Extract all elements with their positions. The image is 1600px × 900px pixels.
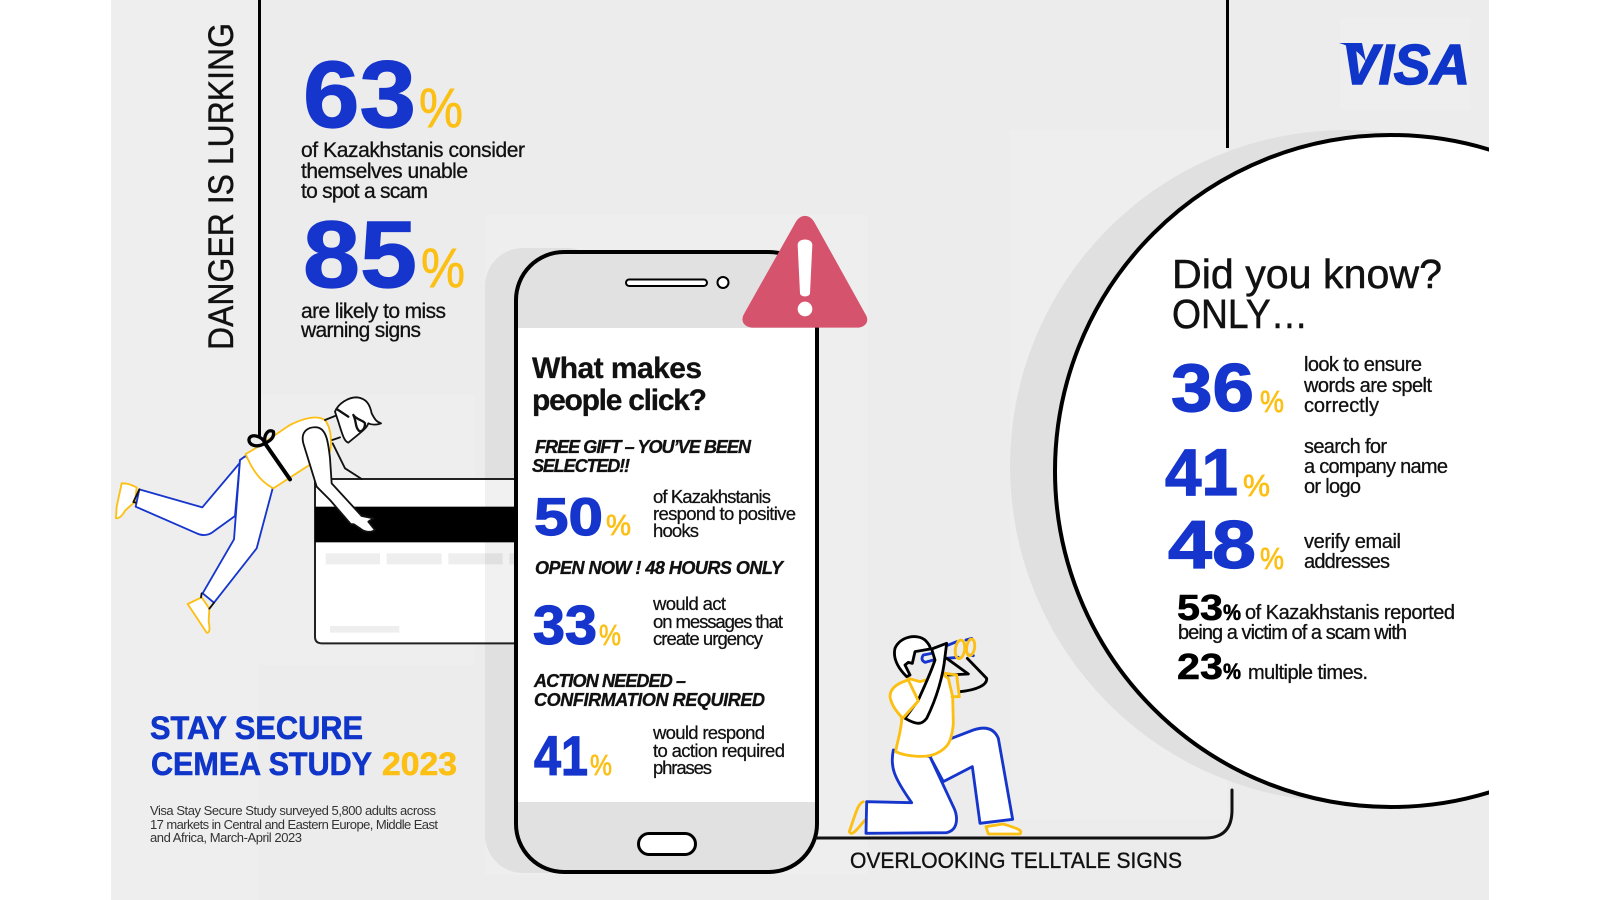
camera bbox=[718, 277, 728, 288]
hook: free gift: SELECTED!! bbox=[532, 456, 630, 476]
victim stat: % bbox=[1223, 659, 1241, 684]
stat: 41 percent: search for bbox=[1304, 436, 1387, 458]
hook: urgency: % bbox=[599, 620, 621, 652]
rear arm bbox=[333, 443, 362, 479]
rear arm bbox=[947, 658, 987, 692]
victim stat: multiple times. bbox=[1248, 662, 1368, 684]
stat: 48 percent: % bbox=[1260, 541, 1284, 576]
vertical heading: danger is lurking: DANGER IS LURKING bbox=[202, 23, 241, 350]
study note: 17 markets in Central and Eastern Europe, Middle East bbox=[150, 817, 438, 832]
visa logo: VISA bbox=[1342, 33, 1470, 97]
study note: Visa Stay Secure Study surveyed 5,800 adults across bbox=[150, 803, 436, 818]
heading: did you know bbox=[1172, 251, 1442, 337]
stat: 36 percent: correctly bbox=[1304, 395, 1379, 417]
victim stat: % bbox=[1223, 600, 1241, 625]
stat: 41 percent: 41 bbox=[1165, 435, 1238, 509]
hook: urgency: would act bbox=[652, 593, 726, 614]
stat: 48 percent bbox=[1168, 507, 1401, 583]
phone screen bbox=[518, 328, 815, 802]
hook: action needed: CONFIRMATION REQUIRED bbox=[534, 690, 765, 710]
hook: action needed: 41 bbox=[534, 724, 588, 787]
hook: urgency: 33 bbox=[533, 594, 597, 656]
hook: action needed: % bbox=[590, 750, 612, 782]
front arm bbox=[905, 643, 947, 723]
phone shadow shape bbox=[485, 248, 605, 873]
stat: 41 percent: % bbox=[1243, 468, 1270, 503]
phone heading bbox=[532, 352, 707, 417]
did you know circle bbox=[1010, 130, 1489, 809]
neck bbox=[325, 416, 340, 440]
stat: 41 percent: or logo bbox=[1304, 476, 1361, 498]
binoculars barrel bbox=[922, 638, 973, 662]
hook: free gift: 50 bbox=[534, 488, 603, 547]
stat: 63 percent: % bbox=[419, 76, 463, 139]
stat: 85 percent: warning signs bbox=[300, 319, 421, 342]
home button bbox=[638, 834, 696, 854]
study title: 2023 bbox=[382, 746, 457, 782]
hook: free gift: hooks bbox=[653, 520, 699, 541]
falling man illustration bbox=[116, 397, 381, 633]
kneeling man with binoculars bbox=[849, 637, 1021, 834]
hook: urgency: on messages that bbox=[653, 611, 783, 632]
hook: action needed: would respond bbox=[652, 722, 765, 743]
stat: 41 percent bbox=[1165, 435, 1448, 509]
hook: free gift: of Kazakhstanis bbox=[653, 486, 771, 507]
phone bbox=[516, 252, 817, 872]
hook: action needed: phrases bbox=[653, 757, 712, 778]
speaker bbox=[626, 280, 707, 286]
study note: and Africa, March-April 2023 bbox=[150, 830, 302, 845]
study note bbox=[150, 803, 438, 845]
head bbox=[894, 637, 930, 677]
victim stat: being a victim of a scam with bbox=[1178, 622, 1407, 644]
back leg bbox=[930, 728, 1013, 823]
stat: 63 percent: 63 bbox=[303, 42, 416, 148]
top connector line bbox=[1226, 0, 1229, 148]
front leg bbox=[866, 750, 957, 833]
vertical rope line bbox=[258, 0, 261, 437]
shoes bbox=[849, 802, 865, 833]
shoes bbox=[116, 483, 137, 518]
hook: free gift: FREE GIFT – YOU’VE BEEN bbox=[535, 437, 752, 457]
front arm bbox=[303, 427, 375, 532]
binocular lenses bbox=[954, 639, 976, 659]
phone heading: people click? bbox=[532, 384, 707, 417]
hook: action needed bbox=[533, 671, 785, 787]
credit card illustration bbox=[315, 479, 519, 643]
stat: 36 percent: % bbox=[1260, 384, 1284, 419]
front sleeve bbox=[890, 680, 918, 718]
study title: STAY SECURE bbox=[150, 710, 363, 746]
icon: alert triangle bbox=[742, 216, 867, 328]
stat: 36 percent: look to ensure bbox=[1304, 354, 1422, 376]
stat: 63 percent bbox=[301, 42, 525, 203]
stat: 63 percent: to spot a scam bbox=[301, 180, 428, 203]
stat: 48 percent: 48 bbox=[1168, 507, 1256, 583]
circle shadow bbox=[1010, 130, 1388, 800]
stat: 63 percent: of Kazakhstanis consider bbox=[301, 139, 525, 162]
torso bbox=[896, 675, 953, 756]
label: overlooking telltale signs: OVERLOOKING TELLTALE SIGNS bbox=[850, 848, 1182, 873]
phone heading: What makes bbox=[532, 352, 702, 385]
hook: urgency: OPEN NOW ! 48 HOURS ONLY bbox=[535, 558, 785, 578]
victim stat: 53 bbox=[1177, 587, 1223, 628]
stat: 85 percent bbox=[300, 202, 465, 342]
heading: did you know: Did you know? bbox=[1172, 251, 1442, 297]
stat: 36 percent bbox=[1171, 350, 1432, 426]
trousers bbox=[136, 456, 246, 535]
head bbox=[335, 397, 381, 443]
hook: free gift: respond to positive bbox=[653, 503, 796, 524]
study title: CEMEA STUDY bbox=[151, 746, 372, 782]
stat: 85 percent: 85 bbox=[303, 202, 417, 308]
hook: urgency bbox=[533, 558, 785, 656]
stat: 63 percent: themselves unable bbox=[301, 160, 468, 183]
victim stat: of Kazakhstanis reported bbox=[1245, 602, 1455, 624]
stat: 41 percent: a company name bbox=[1304, 456, 1448, 478]
ground line bbox=[817, 790, 1232, 838]
hook: free gift: % bbox=[606, 510, 631, 542]
harness and knot bbox=[265, 443, 290, 479]
hook: action needed: to action required bbox=[653, 740, 785, 761]
glasses bbox=[337, 409, 365, 431]
stat: 85 percent: are likely to miss bbox=[301, 300, 446, 323]
victim stat: 23 bbox=[1177, 646, 1223, 687]
hook: action needed: ACTION NEEDED – bbox=[533, 671, 686, 691]
stat: 85 percent: % bbox=[421, 236, 465, 299]
stat: 48 percent: verify email bbox=[1304, 531, 1401, 553]
hook: free gift bbox=[532, 437, 796, 547]
stat: 36 percent: 36 bbox=[1171, 350, 1254, 426]
rear sleeve bbox=[945, 673, 959, 697]
heading: did you know: ONLY… bbox=[1172, 291, 1308, 337]
study title bbox=[150, 710, 457, 782]
victim stat bbox=[1177, 587, 1455, 687]
torso bbox=[246, 418, 331, 488]
circle bbox=[1053, 133, 1489, 809]
stat: 36 percent: words are spelt bbox=[1303, 375, 1432, 397]
stat: 48 percent: addresses bbox=[1304, 551, 1390, 573]
hook: urgency: create urgency bbox=[653, 628, 764, 649]
phone body bbox=[516, 252, 817, 872]
